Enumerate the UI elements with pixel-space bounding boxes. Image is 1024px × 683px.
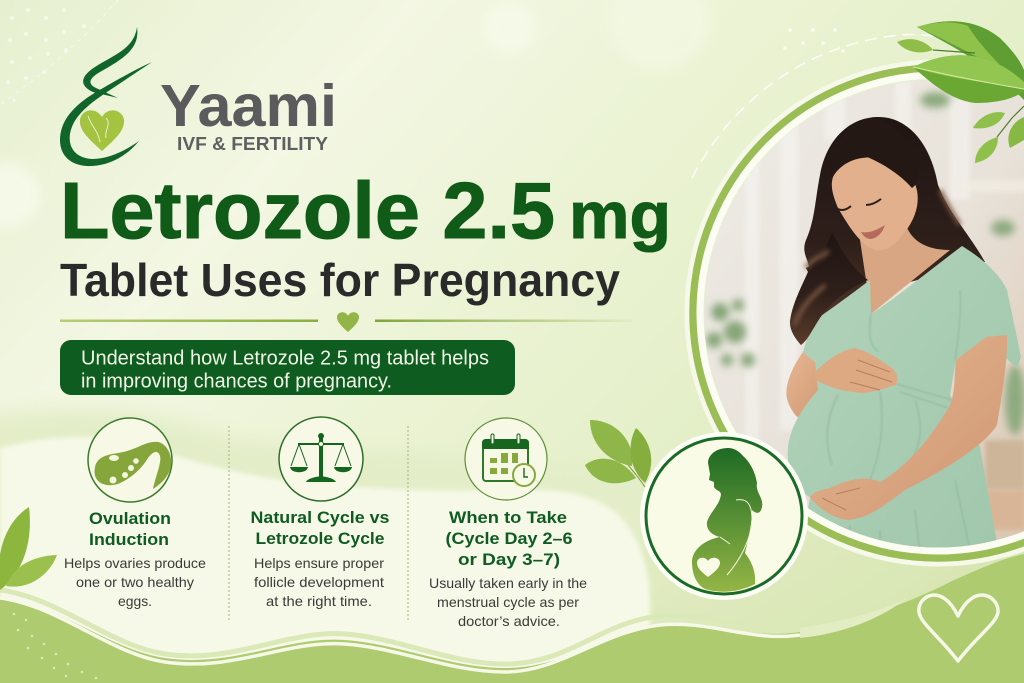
callout pill (60, 340, 515, 395)
heading: (Cycle Day 2–6 (446, 530, 572, 548)
panel: natural vs letrozole cycle: Letrozole Cycle (256, 530, 384, 548)
callout pill: Understand how Letrozole 2.5 mg tablet helps (81, 348, 489, 370)
upper hand (815, 348, 897, 393)
dress (788, 246, 1021, 560)
description: at the right time. (266, 593, 372, 609)
description (254, 555, 384, 609)
callout pill: in improving chances of pregnancy. (81, 370, 392, 392)
photo: pregnant woman (690, 70, 1024, 560)
left arm (786, 352, 818, 418)
icon: outline heart bottom right (919, 595, 998, 661)
icon: ovary (88, 418, 172, 502)
title unit: mg (569, 178, 671, 252)
panel: ovulation induction (64, 418, 206, 609)
logo mark (60, 27, 152, 166)
icon: corner leaves bottom left (0, 507, 57, 590)
heading: Natural Cycle vs (250, 509, 390, 527)
description (64, 555, 206, 609)
panel: when to take (429, 418, 587, 629)
hair front (868, 117, 916, 188)
description (429, 575, 587, 629)
heading: Ovulation (89, 510, 171, 528)
icon: centre leaves (585, 420, 651, 487)
divider with heart (60, 312, 632, 332)
icon: heart in belly (697, 558, 720, 577)
logo (60, 27, 337, 166)
description: Usually taken early in the (429, 575, 587, 591)
title: Letrozole 2.5 (60, 166, 555, 255)
description: Helps ensure proper (254, 555, 384, 571)
face (832, 157, 918, 250)
icon: heart (80, 110, 124, 151)
logo wordmark: Yaami (160, 73, 337, 139)
logo tagline: IVF & FERTILITY (177, 134, 328, 154)
right arm and lower hand (810, 335, 1007, 520)
subtitle: Tablet Uses for Pregnancy (60, 254, 620, 306)
description: doctor’s advice. (458, 613, 560, 629)
heading (446, 509, 572, 569)
bottom wave band (0, 554, 1024, 683)
hair front lock (790, 232, 868, 345)
badge: pregnancy silhouette (640, 432, 808, 600)
description: Helps ovaries produce (64, 555, 206, 571)
photo backdrop (690, 70, 1024, 560)
silhouette (692, 448, 762, 592)
icon: calendar (465, 418, 547, 500)
description: follicle development (254, 574, 384, 590)
description: eggs. (118, 593, 152, 609)
icon: top right leaves (897, 21, 1024, 163)
neck and chest (860, 222, 950, 314)
dotted pattern: top left (0, 0, 118, 105)
hair back (790, 117, 985, 345)
icon: scales (279, 417, 363, 501)
dress shading (827, 290, 970, 556)
description: menstrual cycle as per (437, 594, 579, 610)
photo frame rings (687, 28, 1024, 564)
heading: When to Take (449, 509, 567, 527)
panel: ovulation induction: Induction (89, 531, 169, 549)
description: one or two healthy (76, 574, 194, 590)
panel: natural vs letrozole cycle (250, 417, 390, 609)
heading: or Day 3–7) (458, 551, 560, 569)
